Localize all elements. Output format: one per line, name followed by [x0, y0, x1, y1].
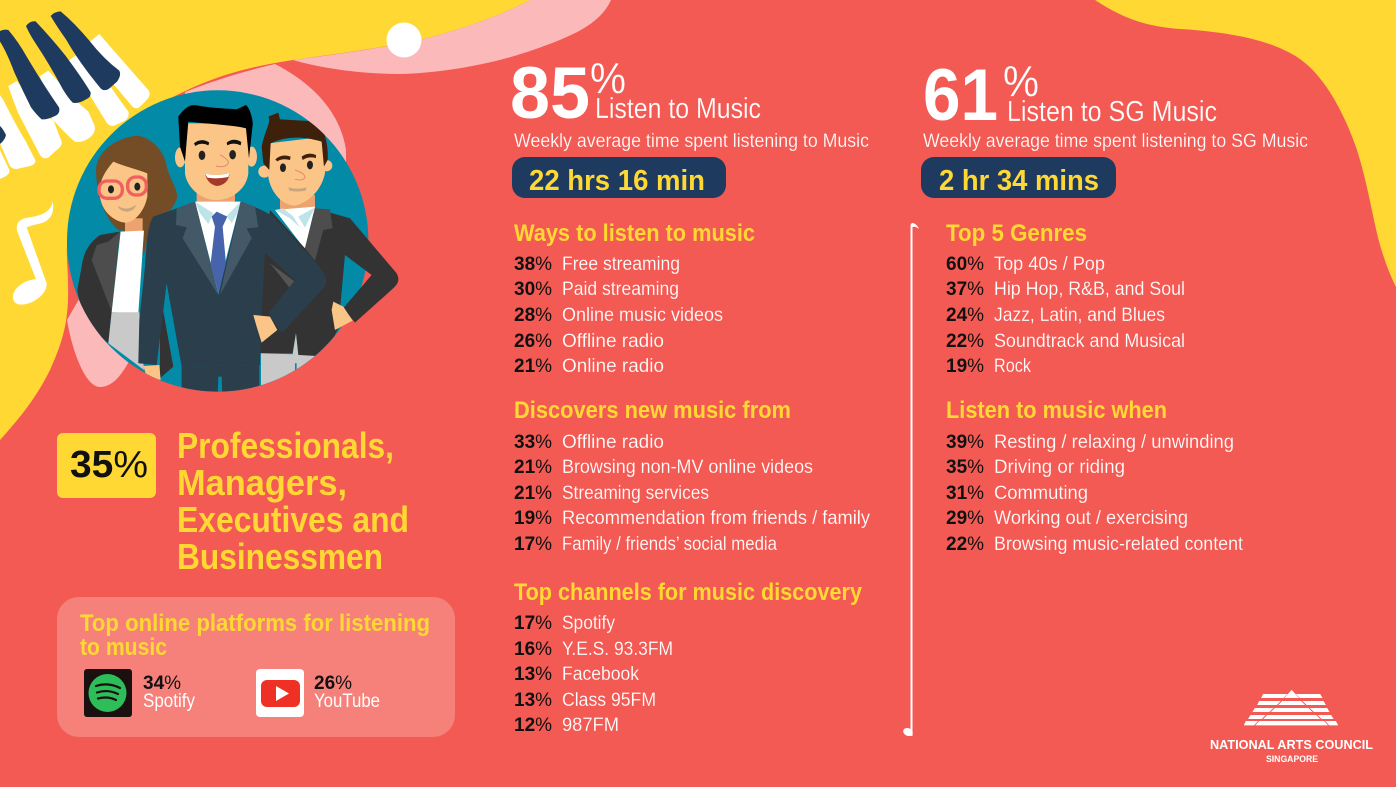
list: top channels for music discovery: 16%	[514, 639, 552, 660]
icon: Spotify	[84, 669, 132, 717]
list: listen to music when: 39%	[946, 432, 984, 453]
list: discovers new music from: 33%	[514, 432, 552, 453]
headline stat: 61% listen to SG music: 61	[923, 55, 998, 136]
list: top channels for music discovery	[514, 579, 863, 736]
background blob: pink top	[293, 0, 611, 74]
list: top 5 genres: Jazz, Latin, and Blues	[994, 305, 1165, 326]
list: ways to listen to music	[514, 220, 755, 377]
headline stat: 85% listen to music: %	[590, 54, 626, 103]
panel heading: Top online platforms for listening	[80, 610, 430, 637]
list: discovers new music from: 17%	[514, 534, 552, 555]
person: man on the right	[258, 113, 398, 400]
list: listen to music when: 22%	[946, 534, 984, 555]
panel: top online platforms	[57, 597, 455, 737]
logo: National Arts Council Singapore: NATIONAL ARTS COUNCIL	[1210, 737, 1373, 752]
list: listen to music when: 35%	[946, 457, 984, 478]
list: ways to listen to music: Free streaming	[562, 254, 680, 275]
decorative white dot	[386, 22, 422, 58]
list: discovers new music from: Family / friends’ social media	[562, 534, 777, 555]
headline stat: 85% listen to music: Listen to Music	[595, 93, 761, 125]
list: discovers new music from: Discovers new music from	[514, 397, 791, 424]
time pill: 22 hrs 16 min: 22 hrs 16 min	[529, 165, 705, 197]
list: discovers new music from	[514, 397, 870, 555]
list: listen to music when: Resting / relaxing / unwinding	[994, 432, 1234, 453]
list: top channels for music discovery: Y.E.S. 93.3FM	[562, 639, 673, 660]
stat: Spotify 34%: 34%	[143, 673, 181, 694]
heading: segment name: Businessmen	[177, 536, 383, 577]
illustration: three professionals	[77, 105, 398, 400]
list: top channels for music discovery: Class 95FM	[562, 690, 656, 711]
heading: segment name: Professionals,	[177, 425, 394, 466]
list: top 5 genres: Soundtrack and Musical	[994, 331, 1185, 352]
list: ways to listen to music: Online radio	[562, 356, 664, 377]
headline stat: 61% listen to SG music: Weekly average time spent listening to SG Music	[923, 131, 1308, 152]
list: discovers new music from: 21%	[514, 457, 552, 478]
panel heading: to music	[80, 634, 167, 661]
stat badge: 35%	[57, 433, 156, 498]
logo mark	[1244, 690, 1338, 725]
stat: YouTube 26%: YouTube	[314, 691, 380, 712]
list: ways to listen to music: 28%	[514, 305, 552, 326]
list: top channels for music discovery: Top channels for music discovery	[514, 579, 863, 606]
list: top 5 genres: 37%	[946, 279, 984, 300]
list: ways to listen to music: 30%	[514, 279, 552, 300]
person: man in the centre	[138, 105, 326, 400]
headline stat: 61% listen to SG music: Listen to SG Music	[1007, 96, 1217, 128]
list: top channels for music discovery: 13%	[514, 690, 552, 711]
stat: Spotify 34%	[143, 673, 195, 712]
headline stat: 85% listen to music: 85	[510, 53, 590, 134]
stat: YouTube 26%	[314, 673, 380, 712]
icon: piano keys	[0, 11, 150, 179]
time pill: 2 hr 34 mins	[921, 157, 1116, 198]
logo: National Arts Council Singapore	[1210, 690, 1373, 764]
headline stat: 61% listen to SG music	[923, 55, 1308, 152]
list: discovers new music from: 19%	[514, 508, 552, 529]
person: woman with glasses	[77, 136, 177, 380]
list: top 5 genres: 22%	[946, 331, 984, 352]
portrait: circle background	[67, 90, 368, 392]
list: discovers new music from: 21%	[514, 483, 552, 504]
list: listen to music when: Commuting	[994, 483, 1088, 504]
list: ways to listen to music: 26%	[514, 331, 552, 352]
list: ways to listen to music: Ways to listen to music	[514, 220, 755, 247]
icon: YouTube	[256, 669, 304, 717]
list: top 5 genres: 60%	[946, 254, 984, 275]
list: ways to listen to music: Online music videos	[562, 305, 723, 326]
list: listen to music when: 29%	[946, 508, 984, 529]
list: top channels for music discovery: 13%	[514, 664, 552, 685]
icon: music note	[13, 202, 53, 305]
stat: YouTube 26%: 26%	[314, 673, 352, 694]
list: top channels for music discovery: Spotify	[562, 613, 615, 634]
list: top 5 genres: Hip Hop, R&B, and Soul	[994, 279, 1185, 300]
list: top 5 genres: Rock	[994, 356, 1031, 377]
list: listen to music when: Listen to music when	[946, 397, 1167, 424]
stat: Spotify 34%: Spotify	[143, 691, 195, 712]
list: top channels for music discovery: 12%	[514, 715, 552, 736]
list: top 5 genres: Top 5 Genres	[946, 220, 1087, 247]
list: discovers new music from: Offline radio	[562, 432, 664, 453]
list: top 5 genres	[946, 220, 1185, 377]
list: top channels for music discovery: 17%	[514, 613, 552, 634]
logo: National Arts Council Singapore: SINGAPORE	[1266, 754, 1318, 764]
heading: segment name	[177, 425, 409, 577]
heading: segment name: Managers,	[177, 462, 347, 503]
list: top channels for music discovery: 987FM	[562, 715, 619, 736]
list: top 5 genres: Top 40s / Pop	[994, 254, 1105, 275]
time pill: 22 hrs 16 min	[512, 157, 726, 198]
time pill: 2 hr 34 mins: 2 hr 34 mins	[939, 165, 1099, 197]
list: ways to listen to music: 21%	[514, 356, 552, 377]
music note divider line	[902, 223, 919, 738]
list: listen to music when: Driving or riding	[994, 457, 1125, 478]
list: top channels for music discovery: Facebook	[562, 664, 639, 685]
list: ways to listen to music: Paid streaming	[562, 279, 679, 300]
list: discovers new music from: Browsing non-MV online videos	[562, 457, 813, 478]
background blob: yellow top right	[1095, 0, 1396, 287]
headline stat: 85% listen to music: Weekly average time spent listening to Music	[514, 131, 869, 152]
list: discovers new music from: Recommendation from friends / family	[562, 508, 870, 529]
list: top 5 genres: 24%	[946, 305, 984, 326]
stat badge: 35%: 35%	[70, 444, 148, 486]
headline stat: 85% listen to music	[510, 53, 869, 152]
list: listen to music when: Working out / exercising	[994, 508, 1188, 529]
background blob: pink behind portrait	[67, 64, 346, 387]
list: ways to listen to music: 38%	[514, 254, 552, 275]
list: discovers new music from: Streaming services	[562, 483, 709, 504]
list: listen to music when: Browsing music-related content	[994, 534, 1244, 555]
panel heading	[80, 610, 430, 661]
list: listen to music when	[946, 397, 1244, 555]
list: top 5 genres: 19%	[946, 356, 984, 377]
headline stat: 61% listen to SG music: %	[1003, 57, 1039, 106]
list: listen to music when: 31%	[946, 483, 984, 504]
background blob: yellow top left	[0, 0, 530, 440]
heading: segment name: Executives and	[177, 499, 409, 540]
list: ways to listen to music: Offline radio	[562, 331, 664, 352]
